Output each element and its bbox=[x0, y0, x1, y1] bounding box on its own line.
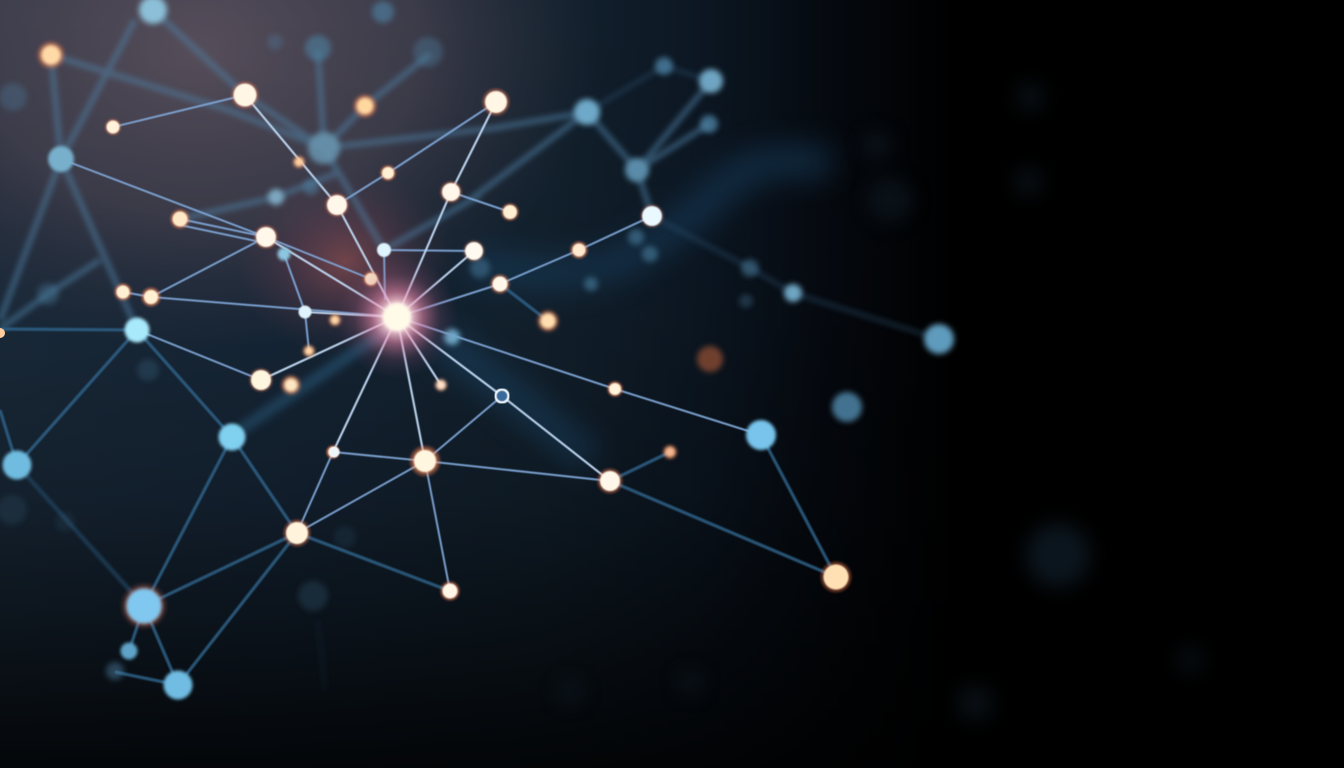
hollow ring node bbox=[496, 390, 508, 402]
sharp blue nodes bbox=[0, 146, 776, 700]
lower-left dim edge bbox=[17, 465, 144, 606]
mid-distance blue edges bbox=[0, 284, 836, 685]
blurred blue background nodes bbox=[0, 0, 954, 680]
blurred background edges bbox=[0, 10, 711, 330]
central hub glow bbox=[335, 255, 459, 379]
blue foreground edges bbox=[61, 95, 761, 591]
bright foreground edges bbox=[245, 95, 610, 481]
far dim edges bbox=[318, 66, 939, 690]
orange glowing nodes bbox=[36, 40, 853, 602]
half-lit node bbox=[325, 444, 341, 460]
faint far-right bokeh bbox=[558, 83, 1204, 721]
